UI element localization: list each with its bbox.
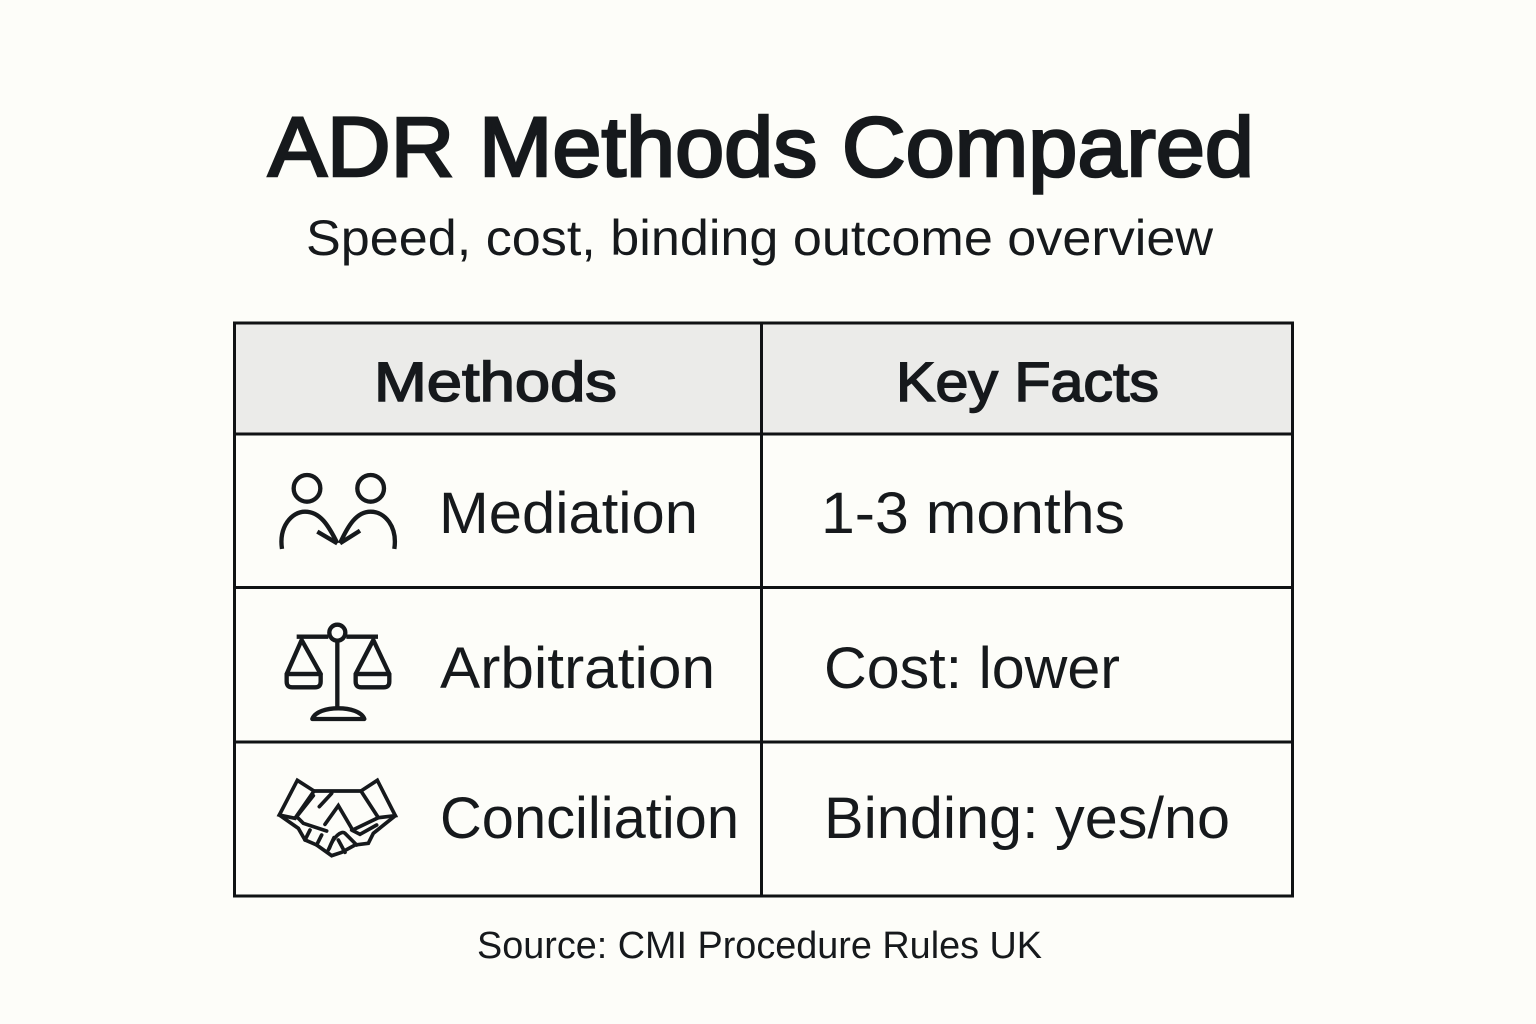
fact: 1-3 months: 1-3 months [821,481,1125,546]
table header background [235,324,1292,433]
icon: handshake (conciliation) [279,780,395,856]
table grid [234,323,1293,896]
icon: two people (mediation) [281,475,395,549]
icon: balance scales (arbitration) [287,625,389,719]
title: ADR Methods Compared [268,100,1254,194]
source note: Source: CMI Procedure Rules UK [477,925,1042,967]
column heading: Key Facts: Key Facts [896,350,1159,413]
subtitle: Speed, cost, binding outcome overview [306,210,1214,266]
fact: Binding: yes/no: Binding: yes/no [824,786,1230,851]
label: Arbitration: Arbitration [440,636,715,701]
comparison table [234,323,1293,896]
label: Mediation: Mediation [439,481,698,546]
label: Conciliation: Conciliation [440,786,739,851]
column heading: Methods: Methods [374,350,617,413]
fact: Cost: lower: Cost: lower [824,636,1120,701]
